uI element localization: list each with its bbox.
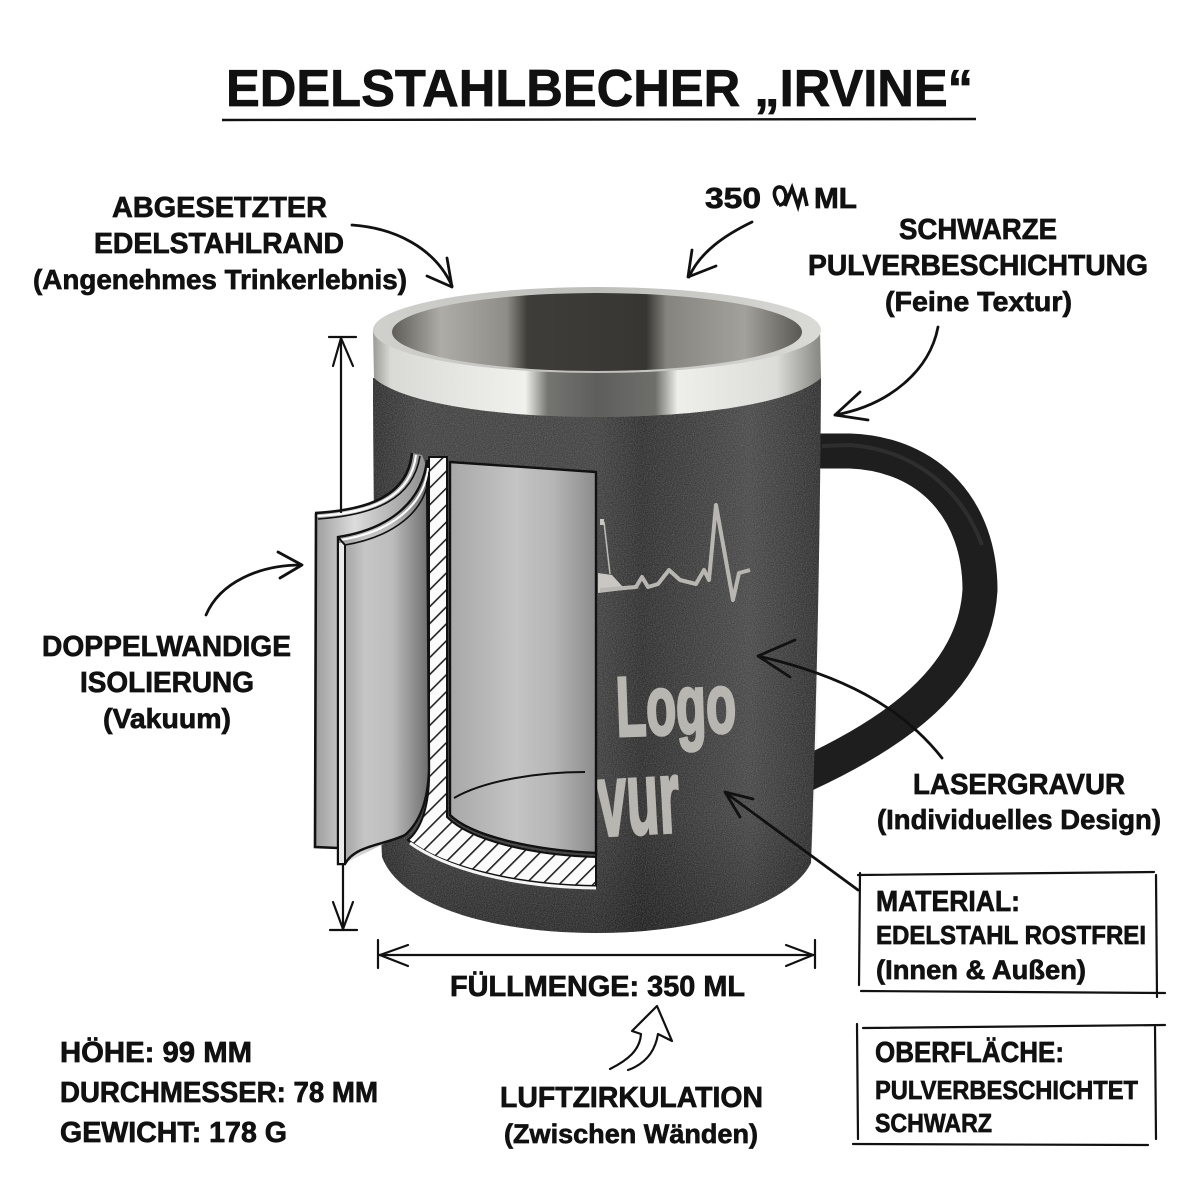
label: air circulation: LUFTZIRKULATION bbox=[500, 1082, 763, 1114]
label: laser engraving: LASERGRAVUR bbox=[913, 769, 1125, 801]
specs list: DURCHMESSER: 78 MM bbox=[60, 1077, 378, 1109]
label: stepped steel rim: EDELSTAHLRAND bbox=[94, 228, 344, 260]
panel: material: MATERIAL: bbox=[876, 886, 1020, 918]
arrow: to rim bbox=[352, 225, 452, 287]
mug body bbox=[373, 378, 821, 933]
peeled wall layers bbox=[315, 453, 429, 864]
engraved logo text: Logo bbox=[614, 656, 738, 754]
label: black powder coating: PULVERBESCHICHTUNG bbox=[808, 250, 1148, 282]
title: EDELSTAHLBECHER „IRVINE“ bbox=[226, 60, 973, 118]
panel: material bbox=[858, 872, 1165, 997]
specs list: GEWICHT: 178 G bbox=[60, 1117, 287, 1149]
panel: material: (Innen & Außen) bbox=[876, 955, 1086, 985]
label: black powder coating bbox=[808, 214, 1148, 317]
icon: outlined air arrow bbox=[610, 1006, 672, 1070]
label: double wall insulation: DOPPELWANDIGE bbox=[42, 631, 291, 663]
arrow: insulation bbox=[206, 552, 302, 615]
label: black powder coating: SCHWARZE bbox=[899, 214, 1057, 246]
label: laser engraving: (Individuelles Design) bbox=[877, 804, 1161, 835]
engraved heartbeat bbox=[598, 505, 750, 600]
panel: surface: SCHWARZ bbox=[875, 1108, 992, 1138]
panel: surface: PULVERBESCHICHTET bbox=[875, 1075, 1138, 1105]
width dimension line bbox=[378, 940, 815, 968]
label: air circulation bbox=[500, 1082, 763, 1149]
label: stepped steel rim: ABGESETZTER bbox=[112, 192, 327, 224]
label: double wall insulation bbox=[42, 631, 291, 734]
height dimension line bbox=[329, 337, 357, 930]
arrow: capacity bbox=[688, 222, 752, 277]
label: capacity top: ML bbox=[814, 183, 857, 215]
rim top ellipse bbox=[373, 287, 821, 373]
label: air circulation: (Zwischen Wänden) bbox=[504, 1119, 758, 1149]
label: capacity top: 350 bbox=[705, 183, 761, 215]
label: stepped steel rim: (Angenehmes Trinkerlebnis) bbox=[33, 264, 407, 295]
label: double wall insulation: ISOLIERUNG bbox=[80, 667, 254, 699]
panel: surface: OBERFLÄCHE: bbox=[875, 1036, 1064, 1069]
label: black powder coating: (Feine Textur) bbox=[885, 286, 1072, 317]
handle bbox=[806, 445, 982, 774]
specs list bbox=[60, 1036, 378, 1149]
label: double wall insulation: (Vakuum) bbox=[103, 703, 231, 734]
label: stepped steel rim bbox=[33, 192, 407, 295]
mug bbox=[315, 287, 982, 933]
body grain bbox=[373, 378, 821, 933]
arrow: laser engraving bbox=[758, 640, 942, 758]
label: filling volume: FÜLLMENGE: 350 ML bbox=[450, 970, 745, 1003]
body shading bbox=[373, 600, 820, 933]
label: capacity top bbox=[705, 183, 857, 215]
steel rim band bbox=[373, 330, 821, 417]
panel: surface bbox=[853, 1024, 1165, 1145]
arrow: coating bbox=[835, 327, 938, 420]
cutaway window bbox=[408, 457, 596, 888]
engraved partial text: vur bbox=[594, 739, 682, 859]
arrow: engraving to box bbox=[725, 792, 858, 890]
label: laser engraving bbox=[877, 769, 1161, 835]
mug interior bbox=[392, 293, 802, 371]
specs list: HÖHE: 99 MM bbox=[60, 1036, 252, 1069]
panel: material: EDELSTAHL ROSTFREI bbox=[876, 920, 1146, 950]
